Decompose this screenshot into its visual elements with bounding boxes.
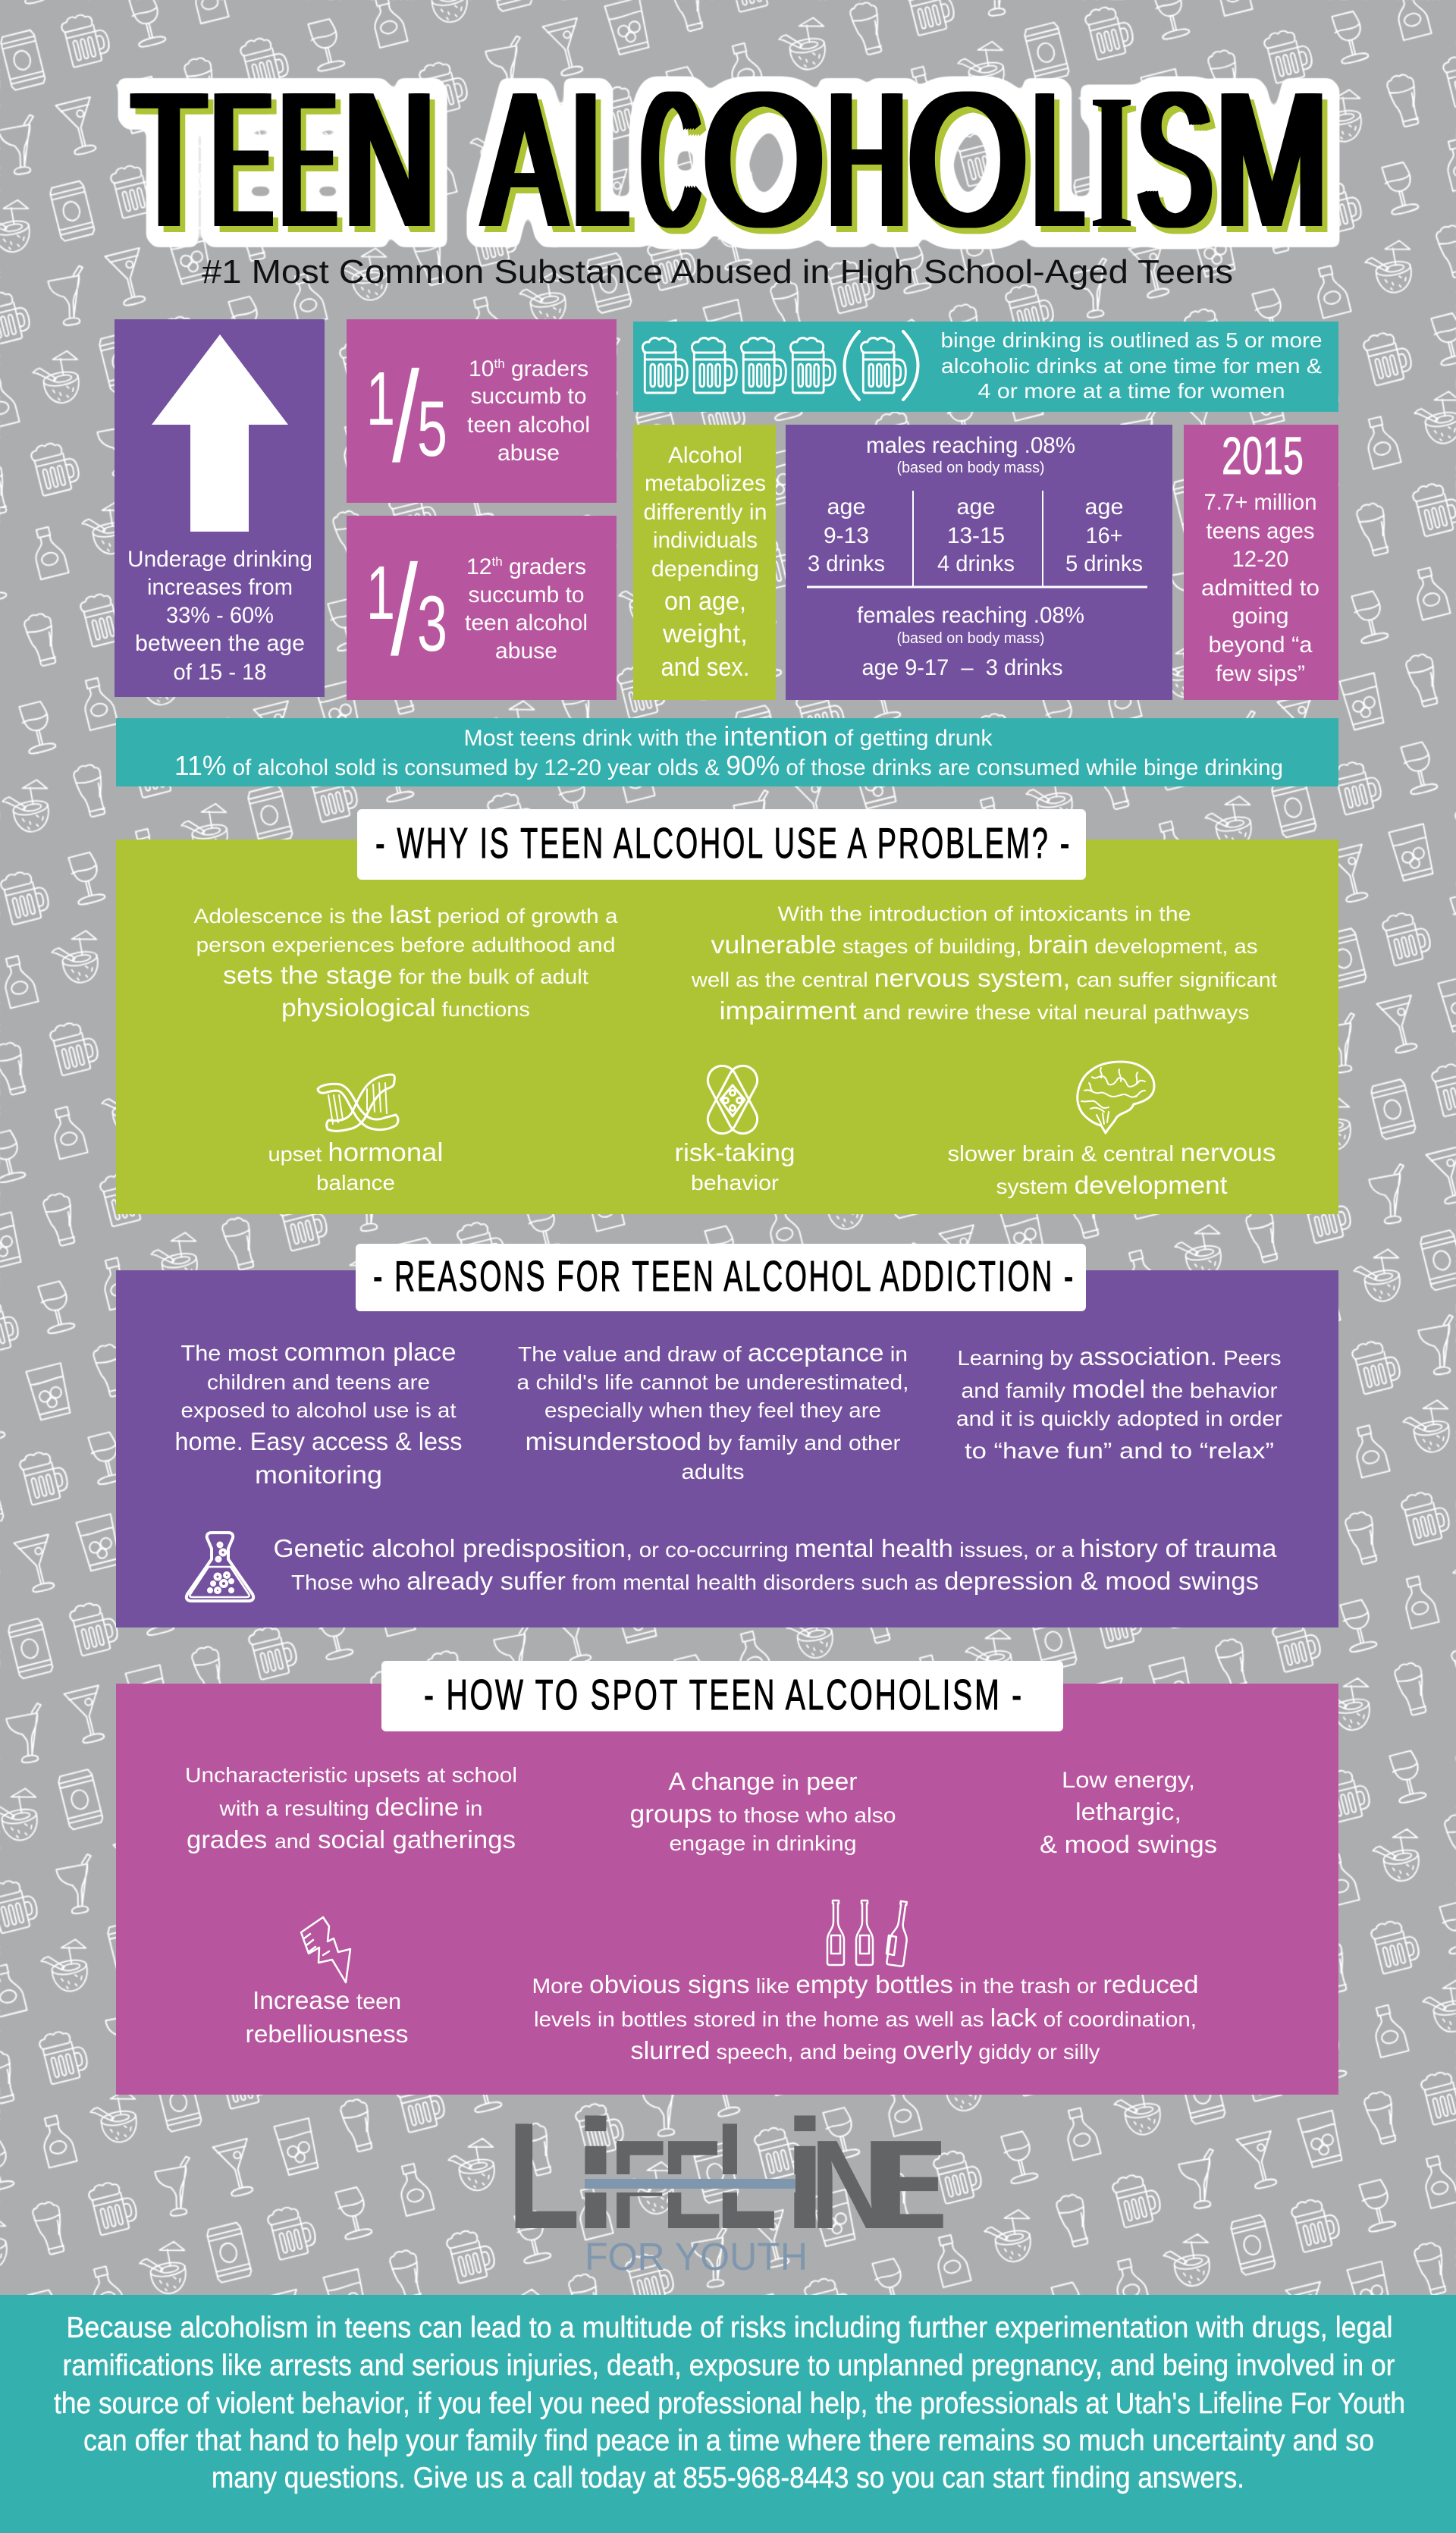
- panel: one fifth of 10th graders: [347, 319, 617, 503]
- stat text: underage drinking: 33% - 60%: [166, 603, 274, 628]
- heading tab: - REASONS FOR TEEN ALCOHOL ADDICTION -: [373, 1252, 1075, 1301]
- text: binge definition: 4 or more at a time for women: [978, 379, 1285, 403]
- title: H: [827, 52, 906, 267]
- text: obvious signs: slurred speech, and being overly giddy or silly: [631, 2036, 1100, 2064]
- caption: hormonal balance: upset hormonal: [268, 1138, 443, 1167]
- panel: alcohol metabolism: metabolizes: [645, 471, 766, 496]
- title: E: [212, 52, 271, 267]
- heading: males: males reaching .08%: [866, 433, 1075, 458]
- text: acceptance: adults: [681, 1460, 745, 1483]
- text: binge definition: alcoholic drinks at one time for men &: [941, 354, 1322, 378]
- text: obvious signs: [532, 1970, 1198, 2064]
- text: association: Learning by association. Peers: [957, 1342, 1282, 1370]
- text: association: and it is quickly adopted in order: [956, 1407, 1282, 1430]
- table column: age 9-13: 9-13: [824, 523, 869, 548]
- text: 7.7 million teens: going: [1232, 604, 1289, 629]
- caption: hormonal balance: [268, 1138, 443, 1194]
- banner: intention of getting drunk: [116, 718, 1338, 786]
- text: 10th graders: 10: [469, 356, 494, 381]
- text: upsets at school: grades and social gatherings: [187, 1825, 516, 1853]
- stat text: underage drinking: between the age: [135, 631, 305, 656]
- text: common place: home. Easy access & less: [174, 1427, 463, 1455]
- title: S: [1138, 52, 1212, 267]
- text: association: to “have fun” and to “relax”: [965, 1439, 1274, 1464]
- text: 7.7 million teens: few sips”: [1216, 661, 1305, 686]
- text: adolescence: person experiences before adulthood and: [196, 934, 616, 956]
- table column: age 16+: age: [1084, 494, 1124, 519]
- text: 10th graders: graders: [505, 356, 588, 381]
- logo: Lifeline for Youth: [516, 2116, 943, 2271]
- panel: alcohol metabolism: Alcohol: [668, 443, 742, 468]
- heading: males: [866, 433, 1075, 476]
- text: low energy: [1040, 1768, 1217, 1858]
- stat: 2015: 2015: [1222, 426, 1304, 485]
- heading: females: females reaching .08%: [857, 603, 1084, 628]
- text: 10th graders: [467, 356, 590, 466]
- text: low energy: & mood swings: [1040, 1831, 1217, 1858]
- panel: alcohol metabolism: and sex.: [661, 653, 749, 682]
- caption: risk-taking: [675, 1138, 795, 1194]
- panel: alcohol metabolism: depending: [651, 557, 759, 582]
- stat text: underage drinking: of 15 - 18: [173, 660, 267, 685]
- table column: age 13-15: age: [957, 494, 995, 519]
- text: 10th graders: abuse: [497, 441, 560, 466]
- title: M: [1216, 52, 1328, 267]
- heading: males: (based on body mass): [896, 460, 1045, 476]
- table column: age 13-15: [937, 494, 1015, 576]
- table column: age 9-13: [808, 494, 885, 576]
- table column: age 16+: 16+: [1086, 523, 1122, 548]
- stat text: underage drinking: increases from: [147, 575, 293, 600]
- caption: risk-taking: behavior: [691, 1171, 779, 1194]
- title: I: [1094, 55, 1129, 268]
- title: E: [281, 52, 335, 267]
- logo: Lifeline for Youth: N: [810, 2114, 893, 2255]
- logo: Lifeline for Youth: E: [878, 2114, 947, 2255]
- text: acceptance: misunderstood by family and other: [525, 1427, 901, 1455]
- title: T: [133, 52, 206, 267]
- text: 7.7 million teens: 7.7+ million: [1204, 490, 1316, 515]
- caption: risk-taking: risk-taking: [675, 1138, 795, 1166]
- panel: alcohol metabolism: weight,: [662, 620, 748, 648]
- text: intoxicants: impairment and rewire these vital neural pathways: [719, 997, 1250, 1025]
- text: association: [956, 1342, 1282, 1464]
- text: 12th graders: 12: [466, 554, 491, 579]
- title: N: [344, 52, 435, 267]
- panel: alcohol metabolism: on age,: [664, 587, 746, 616]
- text: 12th graders: graders: [503, 554, 586, 579]
- icon: bandage: [703, 1061, 762, 1138]
- footer: call to action: can offer that hand to help your family find peace in a time where there remains so much uncertainty and so: [83, 2425, 1374, 2457]
- stat: 1/3: /: [391, 538, 419, 683]
- text: 10th graders: teen alcohol: [467, 413, 590, 438]
- text: 7.7 million teens: teens ages: [1206, 519, 1315, 544]
- caption: slower development: system development: [996, 1171, 1227, 1199]
- text: peer groups: groups to those who also: [629, 1800, 896, 1828]
- text: peer groups: [629, 1768, 896, 1855]
- text: rebelliousness: Increase teen: [253, 1986, 401, 2014]
- panel: reasons for teen alcohol addiction: [116, 1244, 1338, 1627]
- table column: age 13-15: 13-15: [947, 523, 1005, 548]
- banner: intention of getting drunk: 11% of alcohol sold is consumed by 12-20 year olds & 90% of those drinks are consumed while binge drinking: [174, 750, 1283, 781]
- text: 12th graders: [465, 554, 588, 664]
- stat: 1/3: [366, 538, 447, 683]
- logo: Lifeline for Youth: FOR YOUTH: [585, 2235, 808, 2278]
- text: peer groups: engage in drinking: [669, 1831, 857, 1855]
- text: association: and family model the behavior: [962, 1375, 1277, 1403]
- panel: one third of 12th graders: [347, 516, 617, 700]
- title: O: [703, 52, 824, 267]
- text: common place: exposed to alcohol use is at: [180, 1398, 457, 1422]
- text: adolescence: [194, 901, 619, 1022]
- text: intoxicants: well as the central nervous system, can suffer significant: [691, 964, 1278, 992]
- heading tab: [381, 1661, 1063, 1731]
- text: common place: children and teens are: [207, 1370, 430, 1394]
- table column: age 9-13: age: [827, 494, 866, 519]
- logo: Lifeline for Youth: L: [716, 2092, 777, 2261]
- stat: 1/5: [366, 345, 447, 489]
- stat: 1/5: 1: [366, 356, 395, 441]
- panel: 2015 statistic: [1184, 425, 1338, 700]
- text: adolescence: Adolescence is the last period of growth a: [194, 901, 619, 928]
- text: 12th graders: succumb to: [469, 582, 584, 607]
- panel: how to spot teen alcoholism: [116, 1661, 1338, 2095]
- text: low energy: lethargic,: [1075, 1798, 1181, 1825]
- text: low energy: Low energy,: [1062, 1768, 1195, 1793]
- table column: age 9-13: 3 drinks: [808, 551, 885, 576]
- text: genetic predisposition: Those who already suffer from mental health disorders such as depression & mood swings: [291, 1567, 1259, 1595]
- text: 10th graders: th: [494, 356, 505, 371]
- logo: Lifeline for Youth: E: [662, 2114, 723, 2255]
- stat: 1/5: /: [392, 345, 420, 489]
- text: common place: The most common place: [180, 1338, 457, 1366]
- title: [133, 52, 1328, 268]
- text: acceptance: [517, 1339, 908, 1483]
- text: 12th graders: th: [491, 554, 503, 569]
- text: 7.7 million teens: admitted to: [1201, 576, 1320, 601]
- text: 12th graders: teen alcohol: [465, 610, 588, 636]
- icon: up arrow: [152, 334, 288, 532]
- text: intoxicants: With the introduction of intoxicants in the: [778, 902, 1191, 925]
- icon: lightning bolt: [301, 1917, 350, 1982]
- text: binge definition: [940, 328, 1323, 403]
- text: rebelliousness: rebelliousness: [246, 2020, 408, 2048]
- logo: Lifeline for Youth: i: [783, 2088, 827, 2261]
- banner: intention of getting drunk: Most teens drink with the intention of getting drunk: [464, 720, 993, 752]
- text: common place: [174, 1338, 463, 1489]
- text: acceptance: a child's life cannot be underestimated,: [517, 1370, 908, 1394]
- text: 12th graders: abuse: [495, 639, 557, 664]
- heading: females: [857, 603, 1084, 680]
- caption: slower development: [948, 1138, 1276, 1199]
- text: upsets at school: with a resulting decline in: [218, 1793, 482, 1821]
- icon: flask: [187, 1533, 253, 1601]
- panel: reaching .08% table: [786, 425, 1172, 700]
- text: genetic predisposition: Genetic alcohol predisposition, or co-occurring mental health issues, or a history of trauma: [273, 1534, 1277, 1562]
- text: upsets at school: [185, 1763, 517, 1853]
- text: obvious signs: More obvious signs like empty bottles in the trash or reduced: [532, 1970, 1198, 1998]
- stat: 1/3: 1: [366, 551, 395, 636]
- title: C: [642, 52, 699, 267]
- text: acceptance: The value and draw of acceptance in: [518, 1339, 908, 1367]
- text: 10th graders: succumb to: [470, 384, 587, 409]
- icon: dna: [318, 1075, 398, 1131]
- caption: slower development: slower brain & central nervous: [948, 1138, 1276, 1166]
- text: upsets at school: Uncharacteristic upsets at school: [185, 1763, 517, 1787]
- text: intoxicants: [691, 902, 1278, 1025]
- caption: hormonal balance: balance: [316, 1171, 395, 1194]
- heading: females: age 9-17 – 3 drinks: [861, 655, 1063, 680]
- heading tab: [357, 809, 1086, 880]
- heading tab: - HOW TO SPOT TEEN ALCOHOLISM -: [424, 1671, 1024, 1719]
- panel: alcohol metabolism: differently in: [643, 500, 767, 525]
- title: A: [484, 52, 565, 267]
- logo: Lifeline for Youth: F: [610, 2114, 667, 2255]
- icon: empty bottles: [827, 1901, 912, 1966]
- text: binge definition: binge drinking is outlined as 5 or more: [940, 328, 1323, 352]
- panel: binge drinking definition: [633, 322, 1338, 412]
- heading tab: [356, 1244, 1086, 1311]
- stat text: underage drinking: Underage drinking: [127, 547, 312, 572]
- text: adolescence: sets the stage for the bulk of adult: [223, 961, 589, 989]
- logo: Lifeline for Youth: i: [574, 2088, 617, 2261]
- icon: brain: [1078, 1062, 1154, 1133]
- text: obvious signs: levels in bottles stored in the home as well as lack of coordination,: [534, 2004, 1197, 2032]
- heading: females: (based on body mass): [896, 630, 1045, 647]
- panel: alcohol metabolism: individuals: [653, 528, 758, 553]
- table column: age 16+: 5 drinks: [1065, 551, 1143, 576]
- footer: call to action: many questions. Give us a call today at 855-968-8443 so you can start finding answers.: [212, 2462, 1244, 2494]
- text: common place: monitoring: [255, 1461, 382, 1489]
- stat: 1/5: 5: [417, 385, 447, 473]
- panel: why is teen alcohol use a problem: [116, 809, 1338, 1214]
- title: O: [908, 52, 1028, 267]
- text: 7.7 million teens: [1201, 490, 1320, 686]
- panel: alcohol metabolism: [633, 425, 776, 700]
- text: peer groups: A change in peer: [669, 1768, 858, 1795]
- text: 7.7 million teens: 12-20: [1232, 547, 1289, 572]
- icon: beer mugs: [642, 331, 918, 400]
- table column: age 13-15: 4 drinks: [937, 551, 1015, 576]
- footer: call to action: [0, 2295, 1456, 2533]
- text: adolescence: physiological functions: [281, 993, 530, 1022]
- title: L: [573, 52, 627, 267]
- table column: age 16+: [1065, 494, 1143, 576]
- title: L: [1034, 52, 1082, 267]
- heading tab: - WHY IS TEEN ALCOHOL USE A PROBLEM? -: [375, 819, 1072, 868]
- stat: 1/3: 3: [417, 580, 447, 668]
- text: intoxicants: vulnerable stages of building, brain development, as: [711, 931, 1257, 959]
- text: acceptance: especially when they feel they are: [544, 1398, 881, 1422]
- panel: underage drinking increase: [115, 319, 325, 697]
- stat text: underage drinking: [127, 547, 312, 685]
- text: genetic predisposition: [273, 1534, 1277, 1595]
- text: 7.7 million teens: beyond “a: [1209, 632, 1313, 658]
- text: rebelliousness: [246, 1986, 408, 2048]
- logo: Lifeline for Youth: L: [507, 2092, 580, 2261]
- subtitle: #1 Most Common Substance Abused in High School-Aged Teens: [202, 253, 1233, 290]
